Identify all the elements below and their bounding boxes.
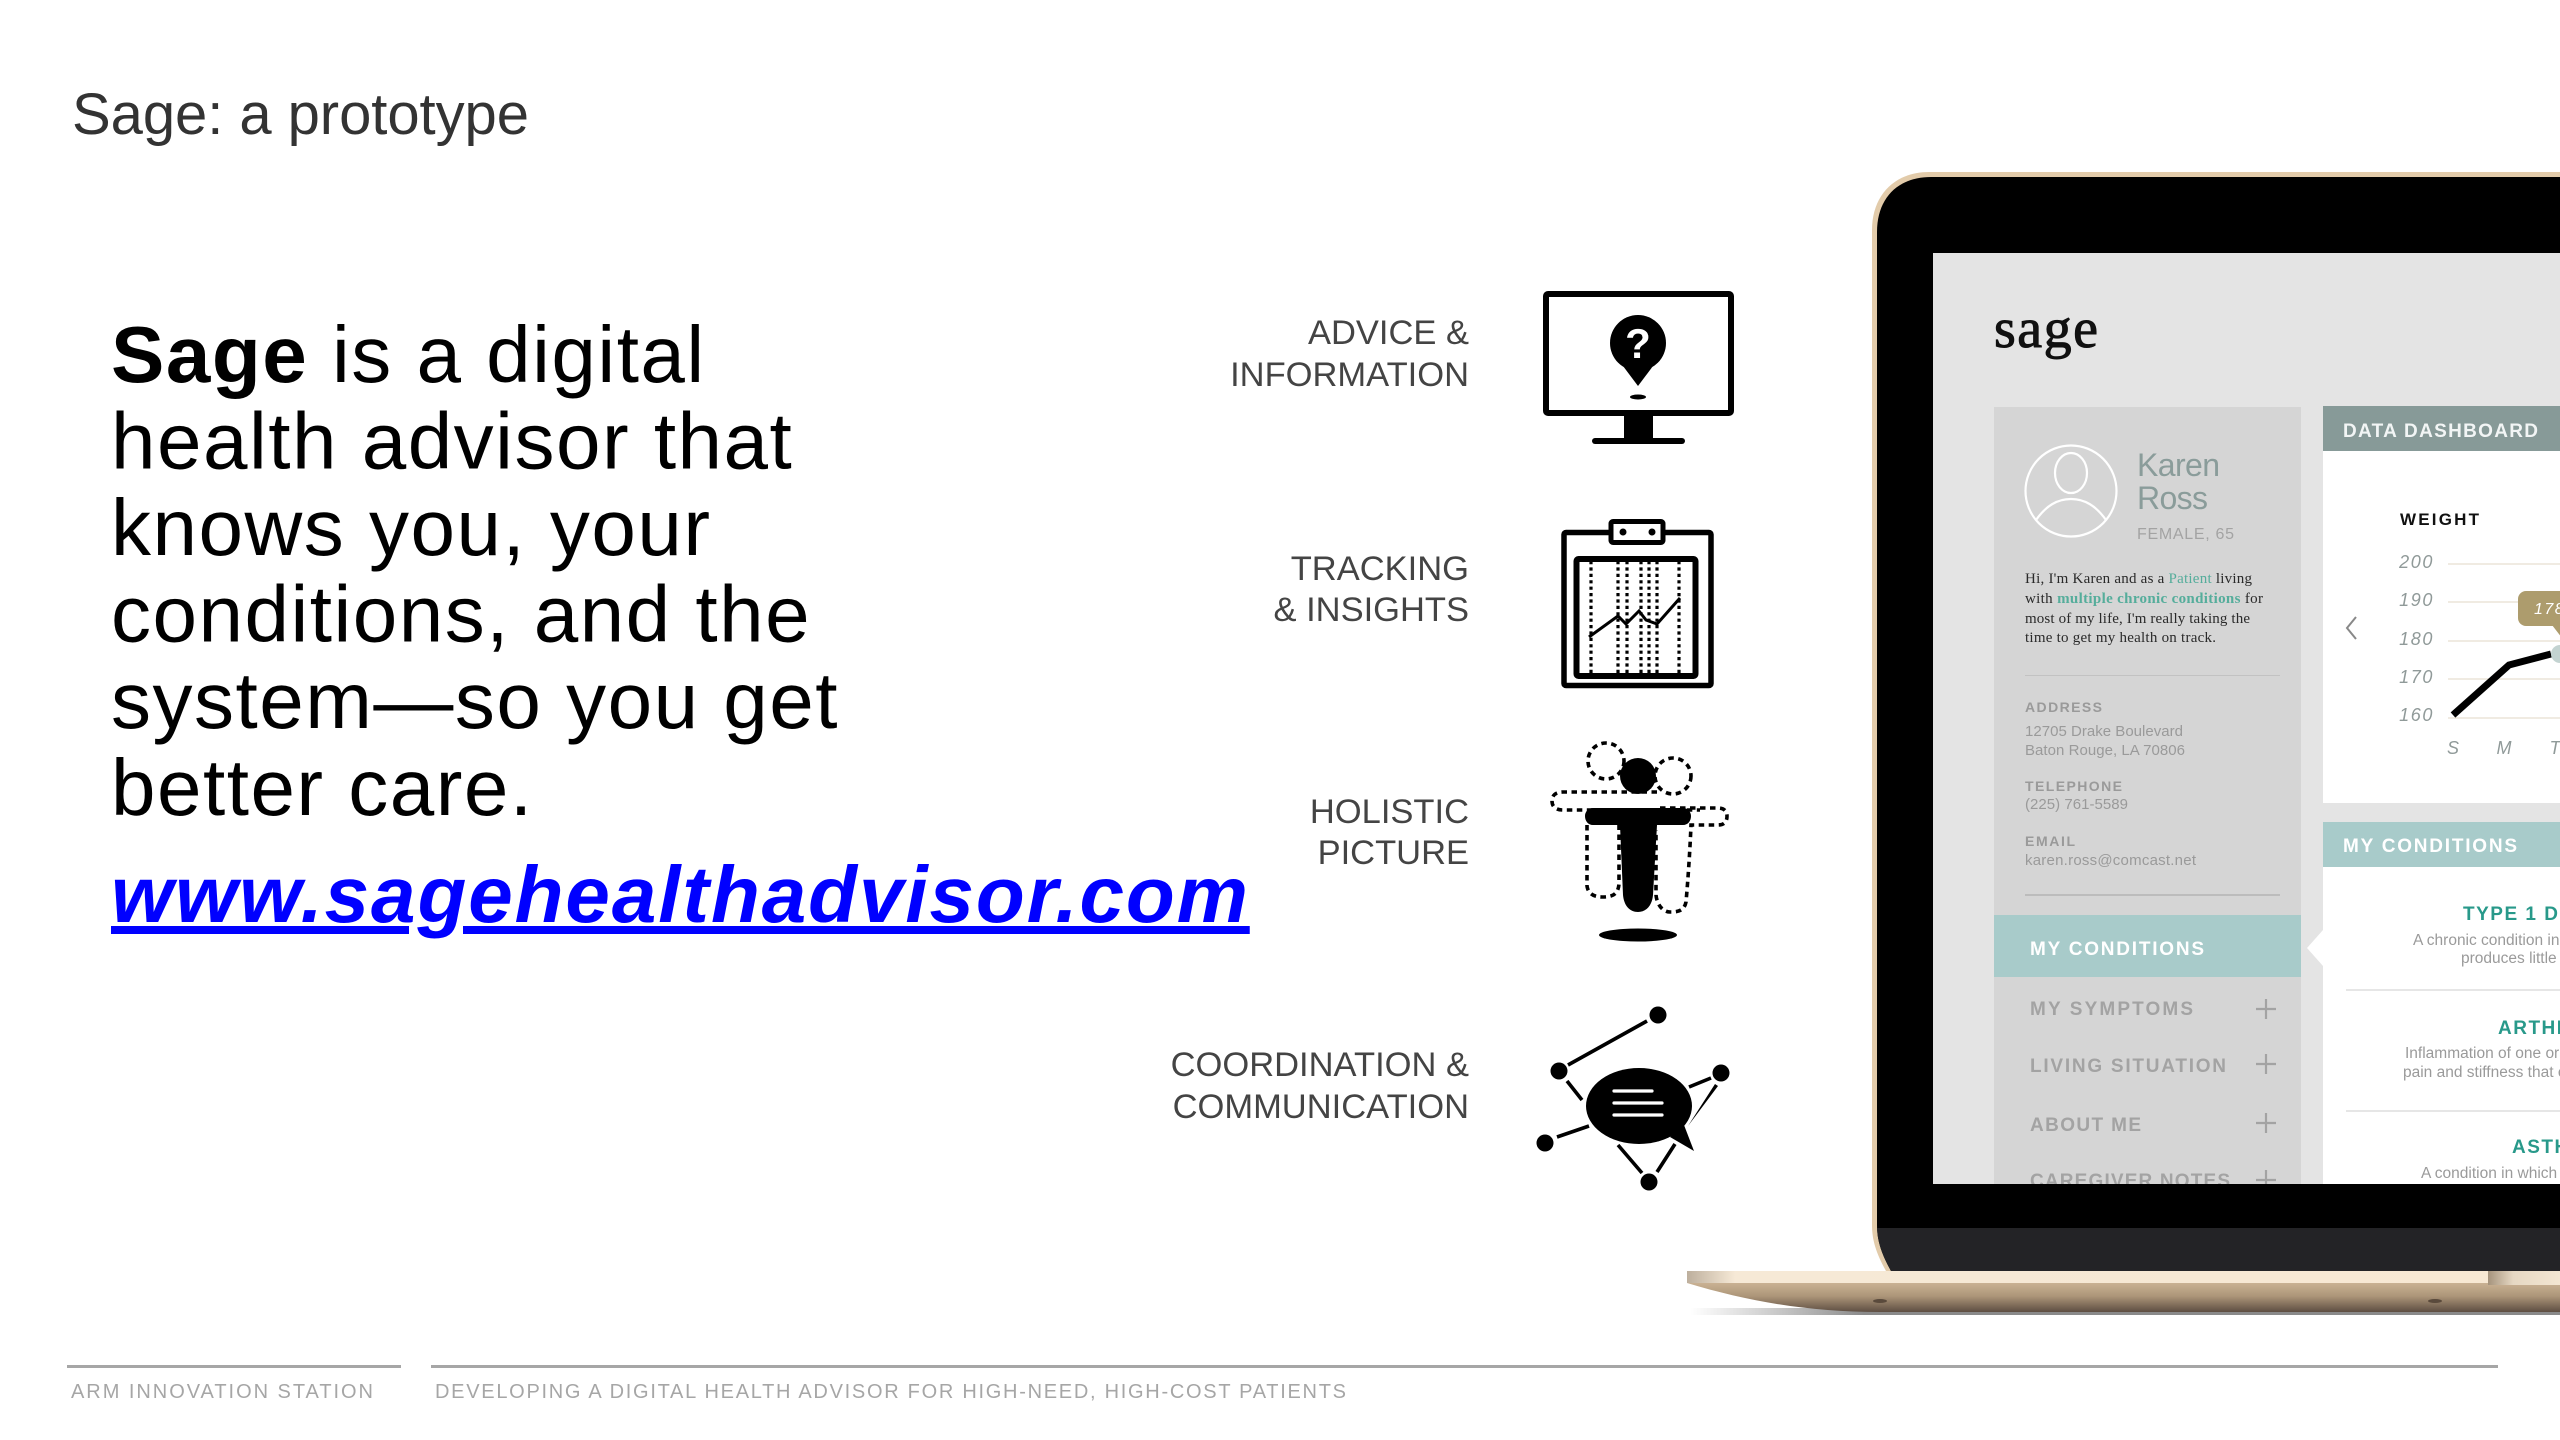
avatar bbox=[2026, 446, 2116, 536]
patient name bbox=[2140, 454, 2218, 510]
contact details: EMAIL bbox=[2025, 833, 2075, 849]
label: tracking and insights: & INSIGHTS bbox=[1273, 591, 1469, 629]
patient bio: most of my life, I'm really taking the bbox=[2025, 611, 2250, 627]
data dashboard panel bbox=[2323, 406, 2560, 803]
sidebar panel bbox=[1994, 407, 2301, 1192]
weight chart: 200 bbox=[2398, 552, 2434, 572]
contact details: (225) 761-5589 bbox=[2025, 796, 2128, 813]
icon: clipboard with chart bbox=[1564, 522, 1711, 686]
contact details: TELEPHONE bbox=[2025, 778, 2122, 794]
label: coordination and communication: COMMUNICATION bbox=[1173, 1088, 1469, 1126]
weight chart bbox=[2347, 510, 2560, 758]
my conditions panel bbox=[2307, 822, 2560, 1184]
footer: right bbox=[431, 1365, 2498, 1403]
active nav item bbox=[1994, 915, 2301, 977]
contact details: 12705 Drake Boulevard bbox=[2025, 723, 2183, 740]
label: holistic picture bbox=[1310, 793, 1469, 872]
weight chart: 160 bbox=[2399, 705, 2434, 725]
headline statement: health advisor that bbox=[111, 396, 793, 486]
label: tracking and insights: TRACKING bbox=[1291, 550, 1469, 588]
patient name: Ross bbox=[2137, 480, 2208, 516]
sage wordmark: sage bbox=[1994, 298, 2098, 360]
weight chart: 190 bbox=[2399, 590, 2434, 610]
tooltip bbox=[2518, 591, 2560, 638]
label: tracking and insights bbox=[1273, 550, 1469, 629]
contact details: ADDRESS bbox=[2025, 699, 2102, 715]
patient bio: with multiple chronic conditions for bbox=[2025, 591, 2263, 607]
nav items: CAREGIVER NOTES bbox=[2030, 1171, 2230, 1192]
nav items: MY SYMPTOMS bbox=[2030, 999, 2193, 1020]
contact details: karen.ross@comcast.net bbox=[2025, 852, 2197, 869]
icon: monitor with question pin: ? bbox=[1625, 320, 1651, 367]
patient bio bbox=[2025, 571, 2263, 646]
laptop shadow bbox=[1690, 1308, 2560, 1315]
icon: speech bubble network bbox=[1536, 1006, 1730, 1190]
contact details bbox=[2025, 699, 2197, 869]
contact details: Baton Rouge, LA 70806 bbox=[2025, 742, 2185, 759]
nav items: ABOUT ME bbox=[2030, 1115, 2141, 1136]
patient demographics: FEMALE, 65 bbox=[2137, 526, 2234, 543]
label: coordination and communication: COORDINATION & bbox=[1171, 1046, 1469, 1084]
footer: left: ARM INNOVATION STATION bbox=[71, 1381, 373, 1403]
nav items: LIVING SITUATION bbox=[2030, 1056, 2226, 1077]
headline statement: system—so you get bbox=[111, 656, 839, 745]
headline statement: better care. bbox=[111, 743, 534, 832]
icon: person with dashed outlines bbox=[1552, 743, 1727, 942]
headline statement: knows you, your bbox=[111, 483, 712, 572]
weight chart: M bbox=[2496, 738, 2512, 758]
weight chart: WEIGHT bbox=[2400, 510, 2480, 529]
title: Sage: a prototype bbox=[72, 82, 529, 147]
website link: www.sagehealthadvisor.com bbox=[111, 850, 1250, 939]
my conditions panel: MY CONDITIONS bbox=[2343, 836, 2517, 857]
app screen bbox=[1933, 253, 2560, 1192]
active nav item: MY CONDITIONS bbox=[2030, 939, 2204, 960]
condition: asthma bbox=[2421, 1140, 2560, 1178]
laptop mockup bbox=[1687, 170, 2560, 1315]
patient name: Karen bbox=[2137, 447, 2220, 483]
weight chart: 170 bbox=[2399, 667, 2434, 687]
laptop lid frame bbox=[1872, 172, 2560, 1271]
headline statement bbox=[111, 310, 839, 832]
label: advice and information: INFORMATION bbox=[1230, 356, 1469, 394]
headline statement: conditions, and the bbox=[111, 570, 811, 658]
laptop base bbox=[1687, 1271, 2560, 1312]
label: advice and information: ADVICE & bbox=[1308, 314, 1469, 352]
data dashboard panel: DATA DASHBOARD bbox=[2343, 421, 2538, 442]
nav plus icons bbox=[2256, 999, 2276, 1190]
label: holistic picture: PICTURE bbox=[1318, 834, 1469, 872]
weight chart: S bbox=[2447, 738, 2459, 758]
condition: arthritis bbox=[2403, 1018, 2560, 1081]
nav items bbox=[2030, 999, 2230, 1192]
label: coordination and communication bbox=[1171, 1046, 1469, 1126]
icon: monitor with question pin bbox=[1546, 294, 1731, 444]
footer: left bbox=[67, 1365, 401, 1403]
footer: right: DEVELOPING A DIGITAL HEALTH ADVISOR FOR HIGH-NEED, HIGH-COST PATIENTS bbox=[435, 1381, 1346, 1403]
label: advice and information bbox=[1230, 314, 1469, 394]
laptop bezel bbox=[1870, 170, 2560, 1280]
patient bio: Hi, I'm Karen and as a Patient living bbox=[2025, 571, 2252, 587]
headline statement: Sage is a digital bbox=[111, 310, 706, 399]
label: holistic picture: HOLISTIC bbox=[1310, 793, 1469, 831]
condition: type 1 diabetes bbox=[2413, 904, 2560, 967]
weight chart: 180 bbox=[2399, 629, 2434, 649]
patient bio: time to get my health on track. bbox=[2025, 630, 2216, 646]
